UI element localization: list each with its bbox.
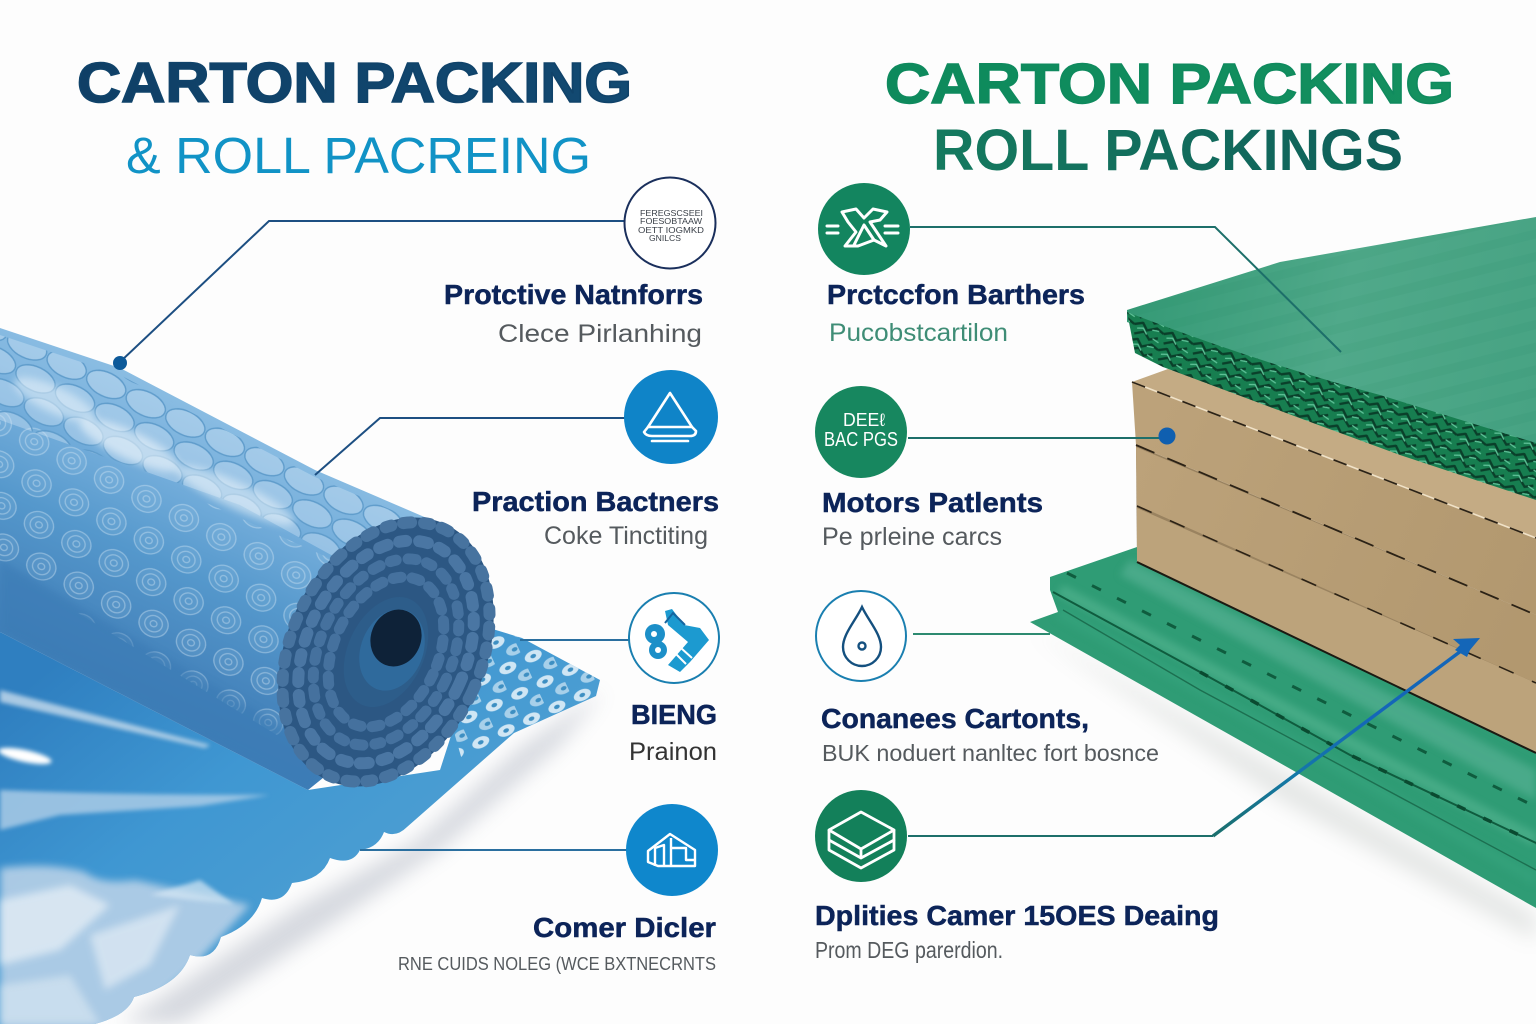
roll core hole — [348, 599, 436, 701]
left label 4 — [398, 912, 716, 974]
carton backing — [1136, 445, 1536, 753]
left title — [77, 51, 632, 184]
left label 4: Comer Dicler — [533, 912, 716, 943]
right label 1: Prctccfon Barthers — [827, 279, 1085, 310]
icon: blue tools — [629, 593, 719, 683]
left label 4: RNE CUIDS NOLEG (WCE BXTNECRNTS — [398, 954, 716, 974]
left title: & ROLL PACREING — [126, 127, 591, 184]
carton box 2 — [1136, 447, 1536, 683]
roll bubbles — [0, 335, 400, 790]
carton box 3 — [1137, 508, 1536, 753]
icon: triangle — [624, 370, 718, 464]
right title — [885, 52, 1454, 183]
right title: CARTON PACKING — [885, 52, 1454, 116]
right label 3 — [821, 703, 1159, 766]
icon: text badge: FOESOBTAAW — [640, 216, 702, 226]
left label 1: Protctive Natnforrs — [444, 279, 703, 310]
left title: CARTON PACKING — [77, 51, 632, 115]
spiral end of roll — [237, 482, 535, 822]
film shadow — [120, 690, 604, 1024]
bubble tail — [452, 627, 600, 760]
lower green sheets — [1030, 547, 1536, 908]
top green sheet — [1127, 217, 1536, 460]
right label 1 — [827, 279, 1085, 347]
icon: badge text — [815, 386, 907, 478]
icon: badge text: DEEℓ — [843, 410, 885, 430]
callout dot: left — [113, 356, 127, 370]
left label 2: Praction Bactners — [472, 486, 719, 517]
icon: house — [626, 804, 718, 896]
left label 2 — [472, 486, 719, 550]
roll body — [0, 328, 450, 790]
image: green sheets and carton stack — [1030, 217, 1536, 940]
image: blue bubble roll — [0, 328, 604, 1024]
left label 1: Clece Pirlanhing — [498, 320, 702, 348]
icon: badge text: BAC PGS — [824, 429, 898, 451]
left label 2: Coke Tinctiting — [544, 522, 708, 550]
right label 3: Conanees Cartonts, — [821, 703, 1089, 734]
right label 1: Pucobstcartilon — [829, 319, 1008, 347]
left label 3: BIENG — [631, 699, 717, 730]
right label 4 — [815, 900, 1219, 963]
right label 3: BUK noduert nanltec fort bosnce — [822, 740, 1159, 766]
carton seams — [1132, 382, 1536, 753]
right label 2: Motors Patlents — [822, 487, 1043, 518]
right label 2: Pe prleine carcs — [822, 523, 1002, 551]
callout dot: right — [1158, 428, 1176, 444]
lower sheet folds — [1053, 560, 1536, 880]
icon: box stack — [815, 790, 907, 882]
left label 3: Prainon — [629, 738, 717, 766]
callout lines: right — [908, 227, 1341, 836]
icon: text badge — [624, 178, 716, 268]
crumpled bubble edge — [1127, 312, 1536, 500]
lower sheet shadow — [1030, 628, 1536, 940]
icon: text badge: OETT IOGMKD — [638, 225, 704, 235]
icon: text badge: FEREGSCSEEI — [640, 208, 703, 218]
unrolled film sheet — [0, 627, 600, 1024]
right label 4: Dplities Camer 15OES Deaing — [815, 900, 1219, 931]
right label 2 — [822, 487, 1043, 551]
arrow — [1213, 638, 1480, 836]
icon: water drop — [816, 591, 906, 681]
carton top face — [1132, 369, 1536, 538]
icon: green cross — [818, 183, 910, 275]
carton box 1 — [1132, 382, 1536, 615]
left label 1 — [444, 279, 703, 348]
film silver highlights — [0, 690, 270, 1024]
right title: ROLL PACKINGS — [933, 118, 1403, 183]
callout lines: left — [120, 221, 630, 850]
icon: text badge: GNILCS — [649, 233, 681, 243]
left label 3 — [629, 699, 717, 766]
right label 4: Prom DEG parerdion. — [815, 937, 1003, 963]
